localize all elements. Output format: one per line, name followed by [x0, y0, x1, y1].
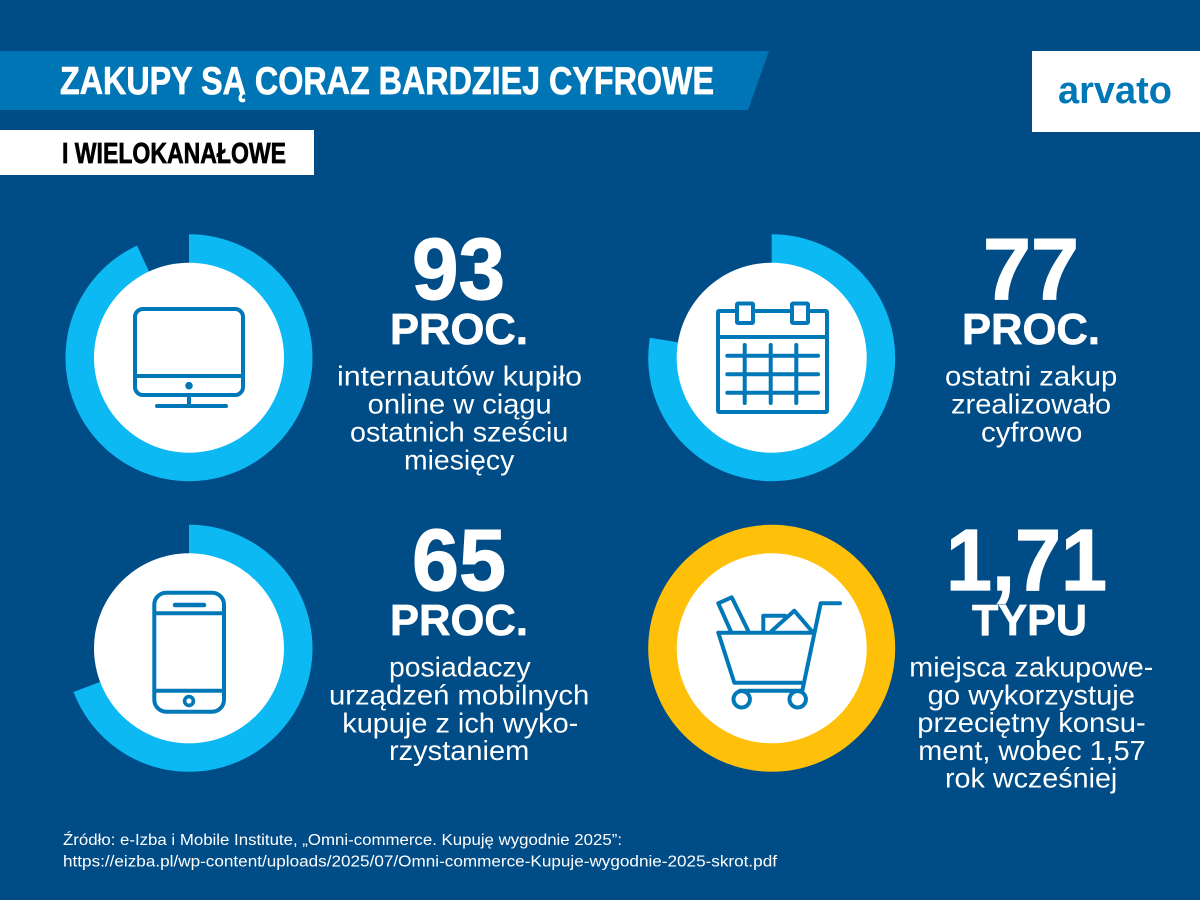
- description: [329, 652, 589, 766]
- description: cyfrowo: [981, 417, 1082, 448]
- donut: full gold ring: [663, 539, 881, 757]
- description: przeciętny konsu-: [917, 707, 1146, 738]
- source note: https://eizba.pl/wp-content/uploads/2025/07/Omni-commerce-Kupuje-wygodnie-2025-skrot.pdf: [63, 854, 778, 871]
- title: ZAKUPY SĄ CORAZ BARDZIEJ CYFROWE: [60, 60, 714, 103]
- statistic: 65: 65: [412, 512, 506, 609]
- donut: 77 percent: [663, 249, 881, 467]
- panel: 77 percent: [663, 221, 1117, 467]
- panel: 1,71 type: [663, 512, 1153, 794]
- description: ostatni zakup: [945, 361, 1117, 392]
- subtitle: I WIELOKANAŁOWE: [62, 138, 286, 170]
- donut: 93 percent: [80, 249, 298, 467]
- description: [909, 652, 1153, 794]
- description: ostatnich sześciu: [350, 417, 568, 448]
- description: rok wcześniej: [945, 763, 1117, 794]
- icon: shopping cart: [718, 597, 840, 708]
- statistic: 1,71: 1,71: [946, 512, 1107, 609]
- icon: desktop monitor: [135, 309, 243, 406]
- title banner: [0, 51, 769, 110]
- description: miejsca zakupowe-: [909, 652, 1153, 683]
- statistic: 77: 77: [983, 221, 1079, 318]
- description: zrealizowało: [951, 389, 1111, 420]
- description: miesięcy: [404, 444, 514, 475]
- logo: arvato: arvato: [1058, 70, 1172, 112]
- description: rzystaniem: [389, 735, 529, 766]
- description: urządzeń mobilnych: [329, 679, 589, 710]
- description: posiadaczy: [389, 652, 531, 683]
- description: kupuje z ich wyko-: [342, 707, 578, 738]
- donut: 65 percent: [80, 539, 298, 757]
- description: online w ciągu: [368, 389, 552, 420]
- description: ment, wobec 1,57: [918, 735, 1146, 766]
- icon: calendar: [718, 304, 827, 412]
- panel: 93 percent: [80, 221, 582, 475]
- source note: [63, 832, 778, 871]
- unit: proc.: PROC.: [390, 305, 528, 354]
- description: go wykorzystuje: [928, 679, 1135, 710]
- icon: smartphone: [154, 593, 224, 712]
- unit: proc.: PROC.: [390, 596, 528, 645]
- statistic: 93: 93: [412, 221, 505, 318]
- source note: Źródło: e-Izba i Mobile Institute, „Omni-commerce. Kupuję wygodnie 2025”:: [63, 832, 622, 849]
- logo: arvato: [1032, 51, 1200, 132]
- subtitle banner: [0, 130, 314, 175]
- description: internautów kupiło: [337, 361, 582, 392]
- description: [337, 361, 582, 475]
- unit: typu: TYPU: [972, 596, 1087, 645]
- panel: 65 percent: [80, 512, 589, 766]
- description: [945, 361, 1117, 448]
- unit: proc.: PROC.: [962, 305, 1100, 354]
